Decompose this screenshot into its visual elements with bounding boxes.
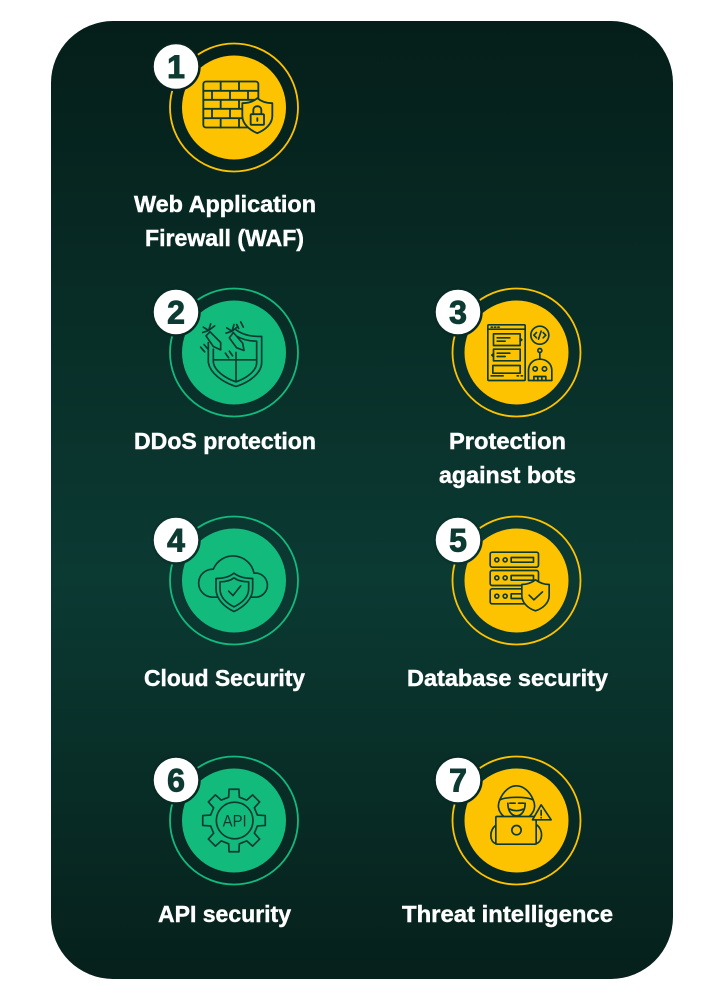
label 1 bbox=[134, 191, 316, 251]
label 3: against bots bbox=[439, 462, 576, 488]
item 7: threat intelligence bbox=[402, 756, 613, 927]
disc 2 bbox=[182, 300, 286, 404]
ring 1 bbox=[170, 44, 298, 172]
badge 3 bbox=[434, 288, 482, 336]
number 3: 3 bbox=[449, 294, 467, 330]
badge 4 bbox=[152, 516, 200, 564]
number 6: 6 bbox=[167, 762, 185, 798]
disc 3 bbox=[464, 300, 568, 404]
ring 7 bbox=[452, 756, 580, 884]
label 6: API security bbox=[158, 901, 291, 927]
item 6: API security bbox=[152, 756, 298, 927]
ring 5 bbox=[452, 516, 580, 644]
badge 2 bbox=[152, 288, 200, 336]
icon: shield under attack bbox=[201, 322, 262, 386]
icon: cloud with shield bbox=[199, 556, 267, 611]
ring 4 bbox=[170, 516, 298, 644]
label 4: Cloud Security bbox=[144, 665, 305, 691]
number 1: 1 bbox=[167, 49, 185, 85]
disc 7 bbox=[464, 768, 568, 872]
badge 6 bbox=[152, 756, 200, 804]
icon: brick wall with lock shield bbox=[203, 82, 272, 133]
item 5: database security bbox=[407, 516, 608, 691]
number 7: 7 bbox=[449, 762, 467, 798]
label 1: Firewall (WAF) bbox=[145, 225, 304, 251]
label 7: Threat intelligence bbox=[402, 901, 613, 927]
icon: server stack with shield bbox=[490, 552, 549, 611]
icon: API gear: API bbox=[223, 811, 247, 830]
badge 1 bbox=[152, 43, 200, 90]
disc 5 bbox=[464, 528, 568, 632]
disc 1 bbox=[182, 56, 286, 160]
ring 3 bbox=[452, 288, 580, 416]
label 2: DDoS protection bbox=[134, 428, 316, 454]
icon: chat window and robot bbox=[488, 325, 552, 380]
ring 6 bbox=[170, 756, 298, 884]
item 3: protection against bots bbox=[434, 288, 580, 488]
ring 2 bbox=[170, 288, 298, 416]
disc 6 bbox=[182, 768, 286, 872]
item 2: DDoS protection bbox=[134, 288, 316, 454]
label 1: Web Application bbox=[134, 191, 316, 217]
label 3: Protection bbox=[449, 428, 566, 454]
disc 4 bbox=[182, 528, 286, 632]
number 4: 4 bbox=[167, 522, 185, 558]
item 4: cloud security bbox=[144, 516, 305, 691]
number 2: 2 bbox=[167, 294, 185, 330]
number 5: 5 bbox=[449, 522, 467, 558]
item 1: web application firewall bbox=[134, 43, 316, 251]
badge 5 bbox=[434, 516, 482, 564]
label 5: Database security bbox=[407, 665, 608, 691]
badge 7 bbox=[434, 756, 482, 804]
icon: hacker with laptop and warning bbox=[491, 786, 551, 844]
label 3 bbox=[439, 428, 576, 488]
icon: API gear bbox=[203, 789, 265, 852]
